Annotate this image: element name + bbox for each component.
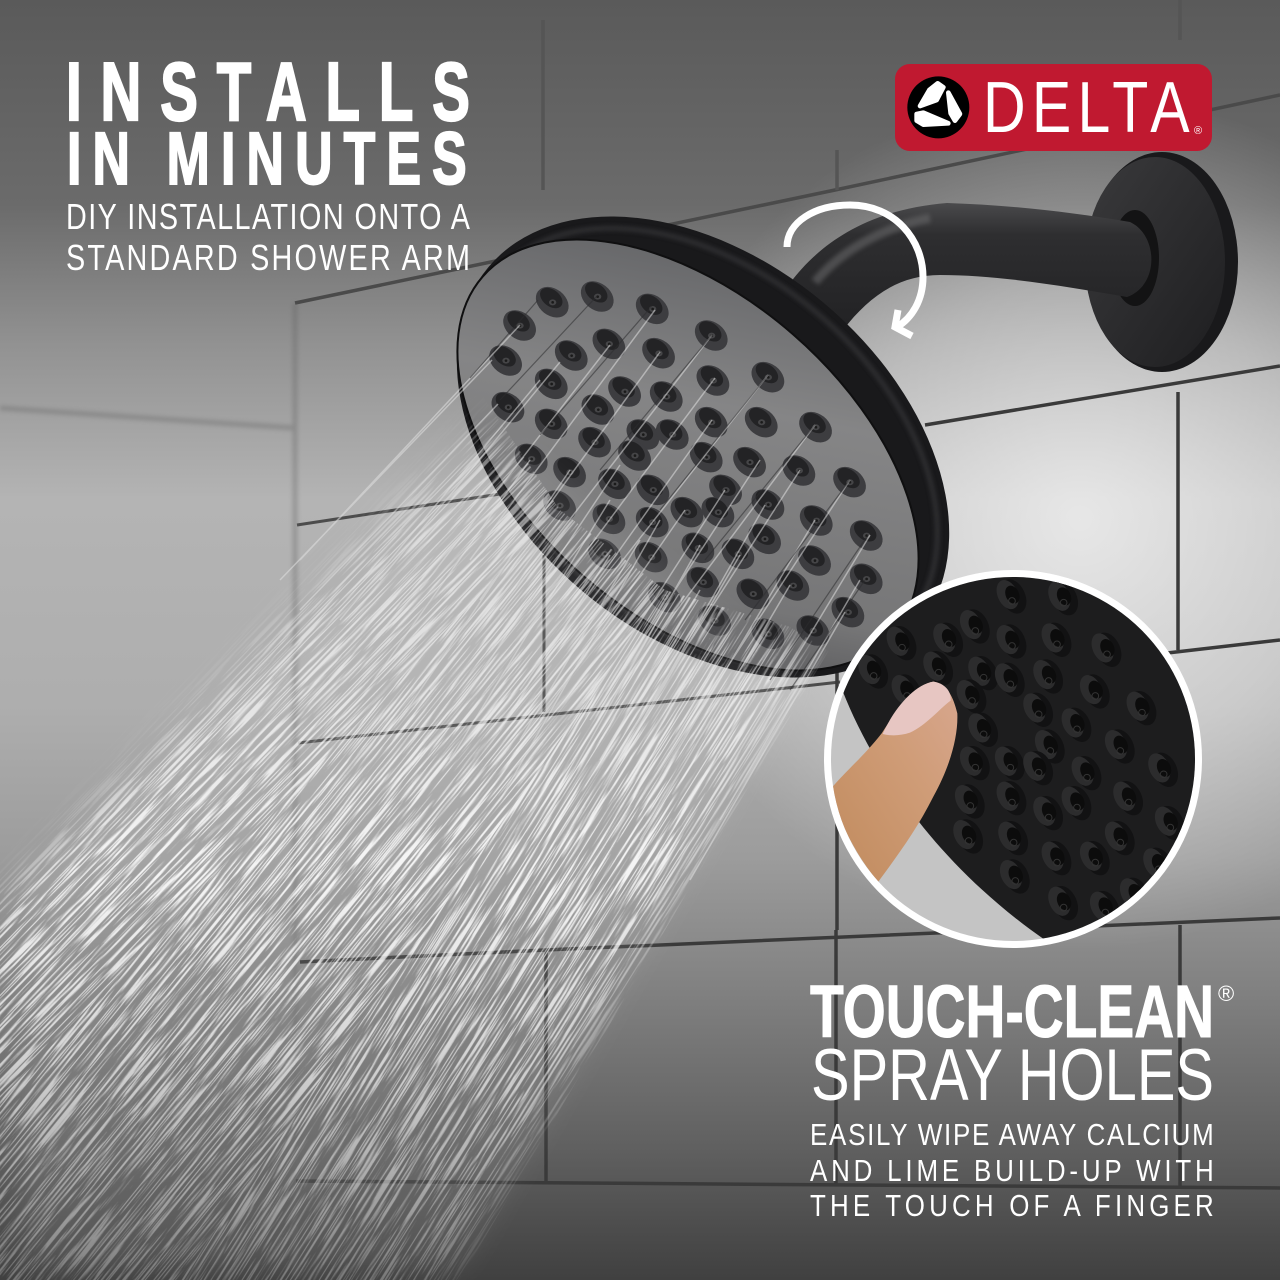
rotation arrow bbox=[787, 205, 923, 336]
shower head bbox=[368, 123, 1038, 771]
text: DIY installation: DIY INSTALLATION ONTO A bbox=[66, 196, 470, 237]
logo mark bbox=[907, 76, 969, 138]
text: easily wipe away bbox=[810, 1117, 1214, 1222]
text: DIY installation bbox=[66, 196, 470, 278]
text: easily wipe away: EASILY WIPE AWAY CALCIUM bbox=[810, 1117, 1214, 1151]
inset nozzles bbox=[854, 575, 1190, 929]
text: easily wipe away: THE TOUCH OF A FINGER bbox=[810, 1188, 1214, 1222]
heading: installs in minutes: INSTALLS bbox=[66, 46, 470, 139]
flange bbox=[1086, 152, 1238, 372]
heading: installs in minutes: IN MINUTES bbox=[67, 117, 467, 200]
shower arm and wall flange bbox=[790, 152, 1238, 372]
water spray bbox=[0, 296, 870, 1280]
text: easily wipe away: AND LIME BUILD-UP WITH bbox=[810, 1153, 1214, 1187]
heading: installs in minutes bbox=[66, 46, 470, 200]
spray nozzles bbox=[483, 275, 889, 655]
spray face bbox=[378, 156, 998, 754]
heading: Touch-Clean spray holes: ® bbox=[1218, 981, 1234, 1006]
curved arm bbox=[790, 203, 1151, 330]
text: DIY installation: STANDARD SHOWER ARM bbox=[66, 237, 470, 278]
logo wordmark: DELTA bbox=[983, 66, 1190, 147]
inset circle: finger wiping spray holes bbox=[820, 560, 1215, 955]
finger bbox=[830, 682, 957, 882]
outer rim bbox=[368, 123, 1038, 771]
heading: Touch-Clean spray holes bbox=[810, 970, 1234, 1116]
logo: Delta bbox=[895, 64, 1212, 151]
registered mark: ® bbox=[1194, 125, 1202, 137]
